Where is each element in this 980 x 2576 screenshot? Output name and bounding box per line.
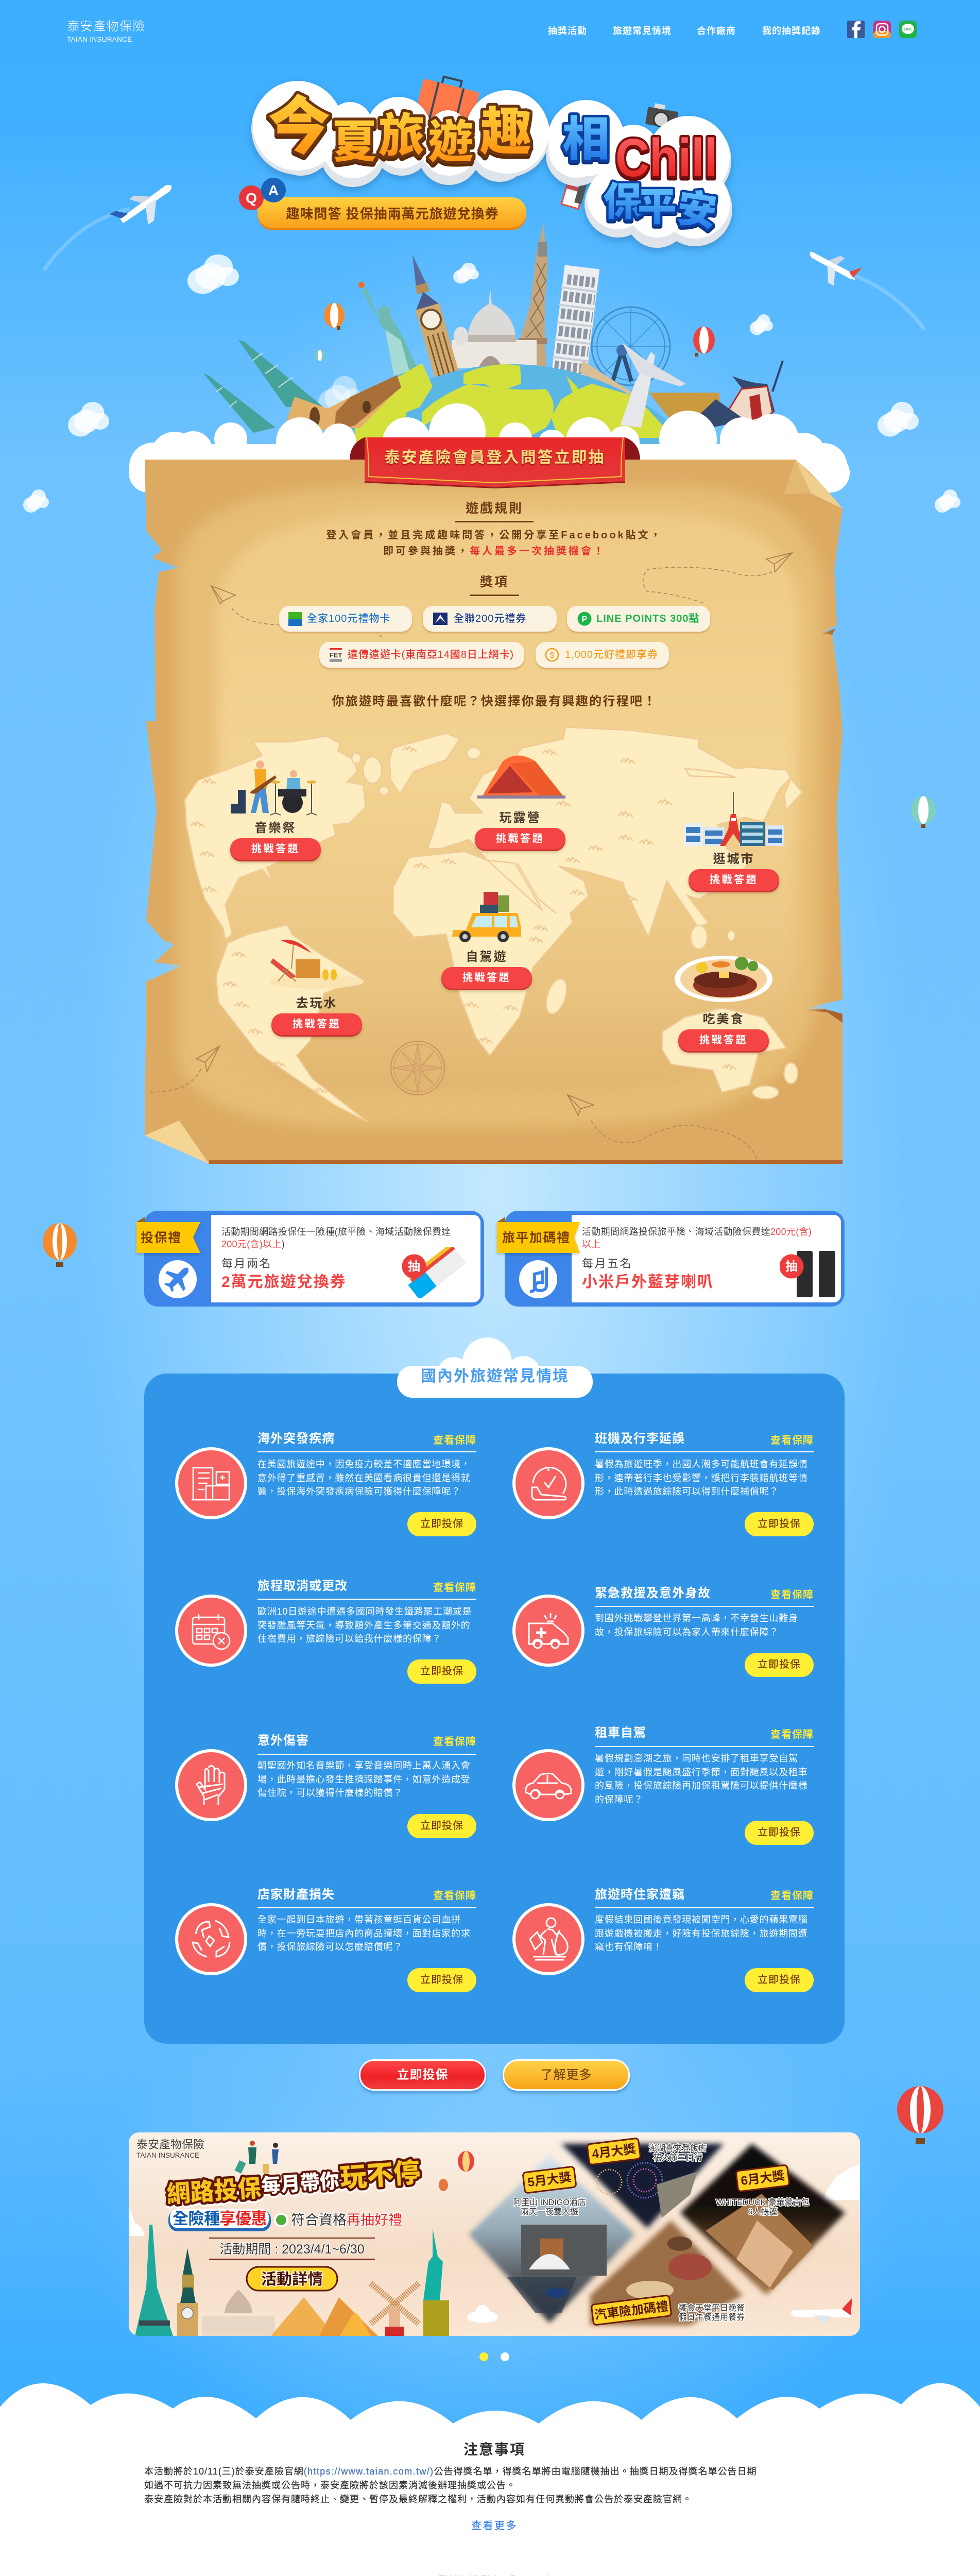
- dates text: [209, 2238, 375, 2259]
- scenario: 租車自駕: [595, 1700, 814, 1847]
- scenario: 海外突發疾病: 立即投保: [420, 1518, 463, 1530]
- scenario: 旅遊時住家遭竊: 跟遊戲機被搬走，好險有投保旅綜險，旅遊期間遭: [595, 1928, 808, 1939]
- icon: check: [274, 2213, 288, 2227]
- ribbon heading: 泰安產險會員登入問答立即抽: [384, 449, 606, 466]
- scenario: 租車自駕: 立即投保: [758, 1827, 801, 1838]
- prize pill: FET card: FET: [330, 651, 342, 659]
- map button: [689, 869, 779, 891]
- banner sub text: 符合資格再抽好禮: [291, 2212, 402, 2228]
- icon: airplane circle: [159, 1260, 197, 1298]
- scenario: 旅程取消或更改: 歐洲10日遊途中遭遇多國同時發生鐵路罷工潮或是: [257, 1606, 472, 1617]
- map button: 挑戰答題: [710, 874, 758, 886]
- photo: Alishan building: [507, 2225, 607, 2313]
- scenario: 租車自駕: 查看保障: [770, 1729, 814, 1740]
- icon: road trip car: [452, 892, 521, 942]
- prize pill: voucher: [536, 642, 669, 668]
- scenario: 旅遊時住家遭竊: 竊也有保障唷！: [595, 1942, 663, 1952]
- scenario: 意外傷害: 意外傷害: [257, 1734, 309, 1748]
- map label: 玩露營: 玩露營: [500, 811, 541, 825]
- card text: quantity: 每月五名: [582, 1257, 632, 1270]
- cloud decor: [129, 2164, 860, 2323]
- scenario: 班機及行李延誤: [595, 1391, 814, 1540]
- badge: A: A: [268, 182, 279, 198]
- text: notices: 如遇不可抗力因素致無法抽獎或公告時，泰安產險將於該因素消滅後辦理抽獎或公告。: [144, 2480, 516, 2490]
- icon: steak on plate: [675, 956, 772, 1002]
- prize text group: 饗食天堂平日晚餐: [679, 2303, 745, 2313]
- scenario: 旅遊時住家遭竊: 立即投保: [758, 1974, 801, 1986]
- prize text group: [513, 2144, 810, 2322]
- map label: 吃美食: 吃美食: [702, 1012, 745, 1026]
- sky artwork layer: landmarks, clouds and parchment: [23, 185, 960, 1164]
- ribbon: 投保禮: [135, 1217, 201, 1256]
- travelers: [235, 2141, 279, 2174]
- map button: 挑戰答題: [293, 1019, 341, 1030]
- prize pill: FET card: 遠傳遠遊卡(東南亞14國8日上網卡): [348, 649, 514, 660]
- nav link: 我的抽獎紀錄: [762, 26, 821, 36]
- label: 6月大獎: 6月大獎: [740, 2169, 785, 2188]
- big white clouds row: [129, 403, 850, 496]
- icon: speakers: [780, 1251, 841, 1300]
- white card body: [211, 1215, 480, 1302]
- heading: 注意事項: 注意事項: [463, 2442, 525, 2458]
- icon: airplane right: [802, 243, 862, 293]
- social icons: [847, 21, 917, 38]
- footer cloud background: [0, 2370, 980, 2576]
- promo card: 旅平加碼禮: [505, 1211, 845, 1307]
- landmark: pagoda: [699, 361, 783, 428]
- heading: 保平安: 保: [603, 180, 642, 224]
- map button: 挑戰答題: [496, 833, 544, 844]
- landmark: Colosseum: [283, 375, 401, 433]
- carousel dot active: [479, 2352, 488, 2361]
- landmark: Statue of Liberty: [358, 282, 424, 384]
- scenario: 班機及行李延誤: 班機及行李延誤: [595, 1432, 685, 1446]
- badge: Q: Q: [246, 190, 257, 206]
- text: notices: [144, 2465, 757, 2506]
- scenario: 旅程取消或更改: 立即投保: [420, 1666, 463, 1677]
- subtitle pill: 趣味問答 投保抽兩萬元旅遊兌換券: [286, 206, 499, 222]
- heading: 保平安: [603, 180, 719, 235]
- nav logo: [67, 20, 146, 43]
- button: 活動詳情: [247, 2267, 337, 2291]
- scenario: 緊急救援及意外身故: 到國外挑戰攀登世界第一高峰，不幸發生山難身: [595, 1613, 798, 1623]
- button: 立即投保: [359, 2059, 486, 2091]
- icon: camera: [645, 102, 679, 129]
- scenario: 班機及行李延誤: 暑假為旅遊旺季，出國人潮多可能航班會有延誤情: [595, 1459, 808, 1469]
- scenario: 海外突發疾病: 查看保障: [433, 1435, 476, 1446]
- globe: [272, 363, 753, 845]
- nav link: 抽獎活動: [548, 26, 587, 36]
- banner title: 每月帶你: [261, 2171, 340, 2197]
- panel: parchment map: [145, 460, 843, 1164]
- card text: prize: 小米戶外藍芽喇叭: [582, 1274, 714, 1291]
- landmark: leaning tower of Pisa: [551, 265, 600, 379]
- card text: terms: 活動期間網路投保旅平險、海域活動險保費達200元(含): [582, 1227, 812, 1237]
- scenario: 海外突發疾病: [257, 1391, 476, 1540]
- icon: ticket: [561, 178, 587, 209]
- scenario: 租車自駕: 租車自駕: [595, 1726, 646, 1740]
- card text: prize: 2萬元旅遊兌換券: [221, 1274, 347, 1291]
- scenario: 意外傷害: 朝聖國外知名音樂節，享受音樂同時上萬人湧入會: [257, 1760, 471, 1771]
- scenario: 意外傷害: 立即投保: [420, 1820, 463, 1832]
- scenario: 旅遊時住家遭竊: 度假結束回國後竟發現被闖空門，心愛的蘋果電腦: [595, 1914, 808, 1925]
- icon: bandaged hand: [177, 1751, 246, 1820]
- prize pill: FamilyMart: [279, 606, 412, 632]
- icon: hospital: [177, 1449, 246, 1518]
- text: game rules: [326, 530, 663, 557]
- icon: camping tent: [477, 755, 565, 799]
- prize pill: PX Mart: [423, 606, 557, 632]
- icon: thief: [514, 1905, 583, 1974]
- nav logo: 泰安產物保險: [67, 20, 146, 33]
- social icons: LINE: [904, 28, 912, 31]
- nav link: 合作廠商: [697, 26, 736, 36]
- text: notices: 泰安產險對於本活動相關內容保有隨時終止、變更、暫停及最終解釋之權利，活動內容如有任何異動將會公告於泰安產險官網。: [144, 2494, 692, 2504]
- nav logo: TAIAN INSURANCE: [67, 36, 132, 43]
- scenario: 緊急救援及意外身故: 查看保障: [770, 1589, 814, 1601]
- small balloons: [439, 2151, 474, 2191]
- card text: terms: 活動期間網路投保任一險種(旅平險、海域活動險保費達: [221, 1227, 451, 1237]
- map button: 挑戰答題: [251, 843, 300, 855]
- heading: Chill: Chill: [615, 128, 717, 188]
- icon: ambulance: [514, 1596, 583, 1665]
- icon: music festival band: [231, 760, 317, 815]
- heading: 今夏旅遊趣: [268, 92, 531, 167]
- scenario: 緊急救援及意外身故: 緊急救援及意外身故: [595, 1586, 711, 1600]
- icon: ticket prize: [402, 1247, 466, 1298]
- plane trail right: [855, 276, 924, 330]
- landmarks strip: [135, 2225, 449, 2336]
- scenario: 店家財產損失: 立即投保: [420, 1974, 463, 1986]
- heading: 相: 相: [562, 113, 610, 166]
- hero title artwork: [239, 75, 735, 253]
- scenario: 店家財產損失: 全家一起到日本旅遊，帶著孩童逛百貨公司血拼: [257, 1914, 461, 1925]
- scenario: 旅遊時住家遭竊: 旅遊時住家遭竊: [595, 1888, 685, 1902]
- prize text group: 6人帳篷: [748, 2207, 777, 2216]
- scenario: 租車自駕: 遊，剛好暑假是颱風盛行季節，面對颱風以及租車: [595, 1767, 808, 1777]
- dates text: 活動期間 : 2023/4/1~6/30: [219, 2242, 365, 2257]
- carousel dot: [501, 2352, 509, 2361]
- prize text group: 花火節三日行: [653, 2153, 702, 2162]
- label: 6月大獎: [736, 2165, 789, 2192]
- heading: map question: 你旅遊時最喜歡什麼呢？快選擇你最有興趣的行程吧！: [332, 694, 657, 708]
- prize pill: PX Mart: 全聯200元禮券: [454, 613, 526, 624]
- scenario: 店家財產損失: 償，投保旅綜險可以怎麼賠償呢？: [257, 1942, 403, 1952]
- landmark: pyramid: [649, 393, 721, 425]
- banner artwork: [129, 2132, 860, 2336]
- heading: 遊戲規則: 遊戲規則: [466, 501, 523, 516]
- landmark: Taipei 101 towers: [203, 340, 323, 433]
- map label: 逛城市: 逛城市: [713, 852, 755, 866]
- heading: 保平安: 平: [638, 185, 677, 229]
- prize text group: 澎湖喜來登飯店: [649, 2144, 707, 2153]
- scenario: 班機及行李延誤: 形，此時透過旅綜險可以得到什麼補償呢？: [595, 1486, 779, 1497]
- scenario: 意外傷害: 查看保障: [433, 1736, 476, 1748]
- text: notices: 本活動將於10/11(三)於泰安產險官網(https://www.taian.com.tw/)公告得獎名單，得獎名單將由電腦隨機抽出。抽獎日期及得獎名單公告日期: [144, 2466, 757, 2477]
- prize pill: LINE points: LINE POINTS 300點: [596, 613, 699, 624]
- label: 4月大獎: [587, 2138, 641, 2165]
- ribbon: 旅平加碼禮: 旅平加碼禮: [502, 1231, 571, 1245]
- icon: airplane left: [109, 175, 182, 240]
- prize pill: FamilyMart: 全家100元禮物卡: [307, 613, 390, 624]
- nav link: 旅遊常見情境: [613, 26, 672, 36]
- button: 了解更多: [503, 2059, 630, 2091]
- icon: broken items: [177, 1905, 246, 1974]
- map button: [230, 838, 321, 860]
- text: game rules: 登入會員，並且完成趣味問答，公開分享至Facebook貼文，: [326, 530, 663, 541]
- ribbon: 投保禮: 投保禮: [141, 1231, 182, 1245]
- divider: [455, 521, 534, 522]
- button: 了解更多: 了解更多: [541, 2068, 592, 2082]
- scenario: 旅程取消或更改: 住宿費用，旅綜險可以給我什麼樣的保障？: [257, 1634, 441, 1644]
- prize pill: voucher: $: [550, 651, 555, 660]
- scenario: 意外傷害: 傷住院，可以獲得什麼樣的賠償？: [257, 1788, 403, 1798]
- decorative small clouds: [23, 255, 960, 513]
- panel: scenarios: [144, 1374, 845, 2044]
- map button: [441, 967, 532, 989]
- ribbon: 旅平加碼禮: [493, 1216, 583, 1257]
- card text: terms: 200元(含)以上): [221, 1239, 285, 1249]
- scenario: 旅程取消或更改: 旅程取消或更改: [257, 1579, 348, 1593]
- landmark: Eiffel tower: [513, 223, 548, 367]
- scenario: 旅程取消或更改: 查看保障: [433, 1582, 476, 1594]
- scenario: 緊急救援及意外身故: 立即投保: [758, 1659, 801, 1670]
- scenario: 海外突發疾病: 醫，投保海外突發疾病保險可獲得什麼保障呢？: [257, 1486, 461, 1497]
- scenario icons: [0, 0, 980, 2009]
- heading: 今夏旅遊趣: 旅: [379, 110, 425, 162]
- title clouds: [251, 81, 732, 248]
- banner logo: [136, 2138, 204, 2159]
- photo: Alishan: [469, 2156, 635, 2323]
- photo: fireworks: [561, 2144, 724, 2228]
- prize text group: 兩天一夜雙人遊: [521, 2207, 578, 2216]
- label: 4月大獎: 4月大獎: [591, 2142, 637, 2161]
- map label: 音樂祭: 音樂祭: [254, 821, 297, 835]
- card text: quantity: 每月兩名: [221, 1257, 272, 1270]
- divider: [470, 595, 519, 596]
- banner logo: TAIAN INSURANCE: [136, 2151, 199, 2159]
- map button: 挑戰答題: [462, 972, 511, 984]
- scenario: 海外突發疾病: 在美國旅遊途中，因免疫力較差不適應當地環境，: [257, 1459, 471, 1469]
- heading: 國內外旅遊常見情境: 國內外旅遊常見情境: [421, 1368, 569, 1385]
- world map continents: [185, 727, 802, 1122]
- card text: terms: [221, 1227, 451, 1249]
- icon: balloon left: [43, 1223, 77, 1267]
- prize pill: voucher: 1,000元好禮即享券: [565, 649, 658, 660]
- photo: tent: [680, 2144, 845, 2295]
- heading: 保平安: 安: [675, 186, 719, 235]
- icon: beach chair and suitcase: [269, 940, 364, 989]
- photo: buffet: [590, 2221, 743, 2325]
- promo banner carousel: [129, 2132, 860, 2336]
- scenario: 租車自駕: 的風險，投保旅綜險再加保租駕險可以提供什麼樣: [595, 1781, 808, 1791]
- scenario: 緊急救援及意外身故: 故，投保旅綜險可以為家人帶來什麼保障？: [595, 1627, 779, 1637]
- white card body: [572, 1215, 841, 1302]
- scenario: 緊急救援及意外身故: [595, 1546, 814, 1685]
- landmark: Big Ben: [401, 251, 460, 382]
- icon: speakers: 抽: [785, 1260, 798, 1274]
- heading: 獎項: 獎項: [480, 575, 509, 589]
- scenario: 意外傷害: 場，此時最擔心發生推擠踩踏事件，如意外造成受: [257, 1774, 471, 1785]
- icon: paper planes and dashed routes: [149, 553, 792, 1159]
- prize text group: 假日午餐通用餐券: [679, 2313, 745, 2322]
- scenario: 海外突發疾病: 海外突發疾病: [257, 1432, 335, 1446]
- button: 立即投保: 立即投保: [397, 2068, 448, 2082]
- label: 5月大獎: [523, 2166, 576, 2193]
- button: 活動詳情: 活動詳情: [261, 2271, 323, 2288]
- landmark: tan bridge: [579, 361, 639, 415]
- landmark: Christ the Redeemer: [621, 343, 686, 428]
- icon: rental car: [514, 1751, 583, 1820]
- heading: 今夏旅遊趣: 夏: [332, 116, 377, 167]
- label: 5月大獎: 5月大獎: [527, 2171, 572, 2190]
- map button: [678, 1029, 769, 1051]
- scenario: 旅遊時住家遭竊: 查看保障: [770, 1890, 814, 1902]
- badge: Q: [239, 185, 264, 210]
- prize text group: 阿里山 INDIGO酒店: [513, 2198, 586, 2207]
- scenario: 班機及行李延誤: 形，連帶著行李也受影響，誤把行李裝錯航班等情: [595, 1473, 808, 1483]
- text: game rules: 即可參與抽獎，每人最多一次抽獎機會！: [383, 546, 606, 557]
- scenario: 店家財產損失: 時，在一旁玩耍把店內的商品撞壞，面對店家的求: [257, 1928, 471, 1939]
- plane trail left: [44, 209, 130, 270]
- heading: 今夏旅遊趣: 趣: [480, 104, 531, 161]
- scenario: 店家財產損失: [257, 1855, 476, 1994]
- prize pill: FET card: [319, 642, 524, 668]
- banner logo: 泰安產物保險: [136, 2138, 204, 2151]
- badge: A: [261, 178, 286, 202]
- icon: calendar cancel: [177, 1596, 246, 1665]
- landmark: Taj Mahal: [452, 289, 537, 368]
- ribbon banner: [350, 437, 640, 488]
- map label: 自駕遊: 自駕遊: [466, 950, 508, 964]
- card text: terms: [582, 1227, 812, 1249]
- landmark: ferris wheel: [592, 307, 670, 385]
- balloons near landmarks: [314, 303, 715, 361]
- card text: terms: 以上: [582, 1239, 601, 1249]
- cloud heading shape: [397, 1337, 593, 1398]
- map label: 去玩水: 去玩水: [296, 996, 338, 1010]
- scenario: 租車自駕: 暑假規劃澎湖之旅，同時也安排了租車享受自駕: [595, 1753, 798, 1764]
- map button: [271, 1013, 362, 1035]
- scenario: 店家財產損失: 店家財產損失: [257, 1888, 335, 1902]
- prize text group: WHITEDUCK 豪華蒙古包: [716, 2197, 810, 2207]
- prize pill: LINE points: [567, 606, 710, 632]
- icon: suitcase: [414, 72, 481, 132]
- scenario: 租車自駕: 的保障呢？: [595, 1794, 643, 1805]
- icon: ticket prize: 抽: [408, 1260, 420, 1274]
- scenario: 旅遊時住家遭竊: [595, 1855, 814, 1994]
- heading: 今夏旅遊趣: 今: [268, 92, 331, 162]
- icon: compass: [391, 1041, 444, 1095]
- banner title: [165, 2158, 421, 2208]
- banner title: 網路投保: [166, 2174, 262, 2208]
- map button: [475, 828, 565, 850]
- scenario: 班機及行李延誤: 查看保障: [770, 1435, 814, 1446]
- scenario: 班機及行李延誤: 立即投保: [758, 1518, 801, 1530]
- scenario: 海外突發疾病: 意外得了重感冒，雖然在美國看病很貴但還是得就: [257, 1473, 471, 1483]
- promo card: 投保禮: [144, 1211, 484, 1307]
- icon: balloon right: [911, 796, 936, 828]
- map button: 挑戰答題: [699, 1035, 748, 1046]
- prize pill: LINE points: P: [582, 615, 588, 624]
- subtitle pill: [257, 197, 526, 230]
- icon: city with tower: [684, 792, 784, 846]
- label: 汽車險加碼禮: 汽車險加碼禮: [594, 2299, 669, 2323]
- scenario: 旅程取消或更改: 突發颱風等天氣，導致額外產生多筆交通及額外的: [257, 1620, 471, 1631]
- link: 查看更多: 查看更多: [471, 2520, 518, 2532]
- icon: delayed clock: [514, 1449, 583, 1518]
- badge: 全險種享優惠: 全險種享優惠: [173, 2210, 267, 2228]
- icon: balloon large: [897, 2086, 943, 2144]
- scenario: 店家財產損失: 查看保障: [433, 1890, 476, 1902]
- icon: music note circle: [519, 1260, 558, 1299]
- scenario: 旅程取消或更改: [257, 1546, 476, 1685]
- banner plane: [791, 2298, 852, 2325]
- banner title: 玩不停: [339, 2158, 421, 2193]
- scenario: 意外傷害: [257, 1700, 476, 1839]
- heading: 今夏旅遊趣: 遊: [428, 116, 473, 167]
